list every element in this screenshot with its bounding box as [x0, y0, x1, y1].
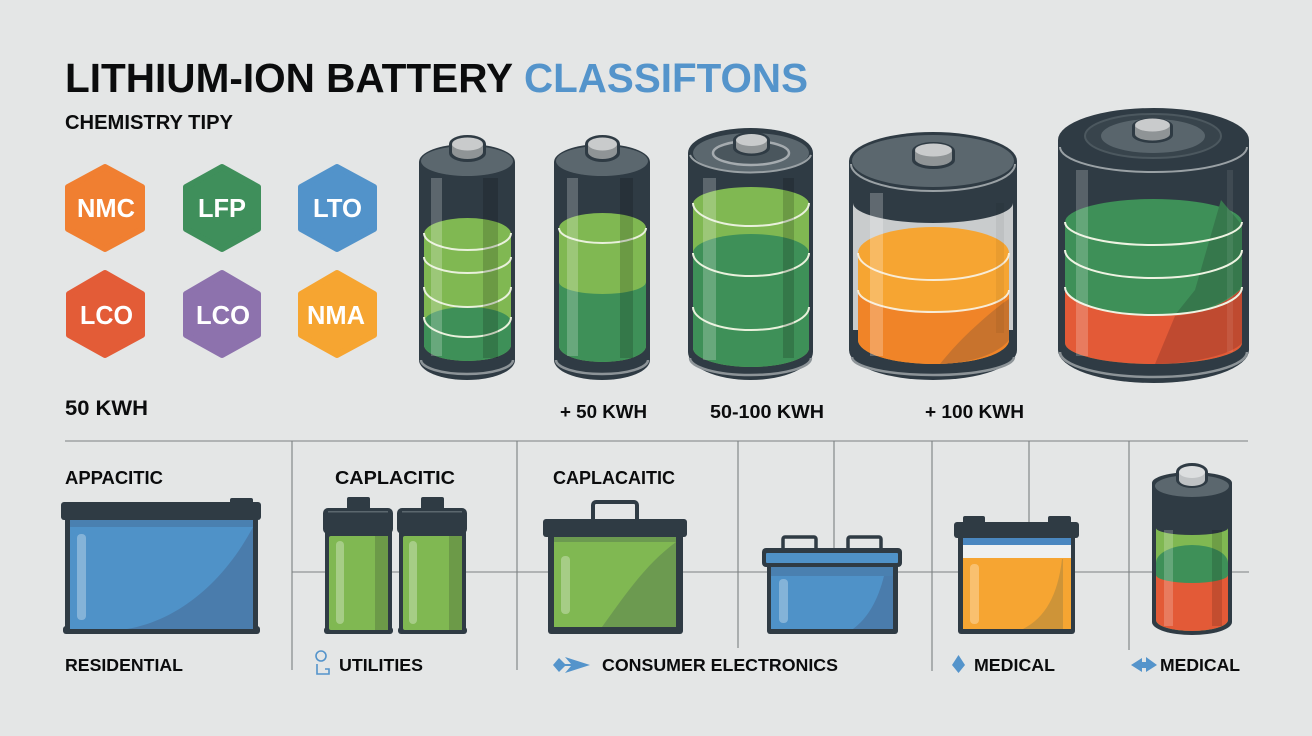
heading: caplacaitic: CAPLACAITIC — [553, 468, 675, 488]
heading: appacitic: APPACITIC — [65, 468, 163, 488]
hexagon: NMC — [68, 167, 142, 249]
hexagon: NMA — [301, 273, 374, 355]
hexagon: NMC: NMC — [77, 195, 135, 223]
label: consumer electronics: CONSUMER ELECTRONICS — [602, 655, 838, 675]
label: medical: MEDICAL — [974, 655, 1055, 675]
icon: diamond — [952, 655, 965, 673]
icon: person — [316, 651, 329, 674]
battery 4 — [849, 132, 1017, 380]
blue battery — [762, 537, 902, 634]
label: 50-100 KWH: 50-100 KWH — [710, 401, 824, 422]
consumer electronics battery — [543, 502, 687, 634]
hexagon: LCO red: LCO — [80, 302, 133, 330]
right cell — [397, 497, 467, 634]
residential battery — [61, 498, 261, 634]
icon: arrow — [553, 657, 590, 673]
orange battery — [954, 516, 1079, 634]
title: LITHIUM-ION BATTERY — [65, 55, 513, 101]
hexagon: LFP — [186, 167, 258, 249]
hexagon: LTO: LTO — [313, 195, 362, 223]
heading: caplacitic: CAPLACITIC — [335, 468, 455, 488]
battery 2 — [554, 135, 650, 380]
left cell — [323, 497, 393, 634]
panel: chemistry hexagons — [68, 167, 374, 355]
icon: double arrow — [1131, 657, 1157, 672]
label: medical 2: MEDICAL — [1160, 655, 1240, 675]
hexagon: LTO — [301, 167, 374, 249]
title: CLASSIFTONS — [524, 55, 808, 101]
label: +100 KWH: + 100 KWH — [925, 401, 1024, 422]
battery 3 — [688, 128, 813, 380]
battery 5 — [1058, 108, 1249, 383]
label: residential: RESIDENTIAL — [65, 655, 183, 675]
label: 50 KWH: 50 KWH — [65, 397, 148, 420]
hexagon: LCO red — [69, 273, 142, 355]
hexagon: NMA: NMA — [307, 302, 365, 330]
utilities battery pair — [323, 497, 467, 634]
subtitle: chemistry: CHEMISTRY TIPY — [65, 112, 234, 134]
hexagon: LCO purple — [186, 273, 258, 355]
hexagon: LFP: LFP — [198, 195, 246, 223]
small cylinder battery — [1152, 463, 1232, 635]
label: utilities: UTILITIES — [339, 655, 423, 675]
label: +50 KWH: + 50 KWH — [560, 401, 647, 422]
battery 1 — [419, 135, 515, 380]
title — [65, 55, 808, 101]
hexagon: LCO purple: LCO — [196, 302, 250, 330]
